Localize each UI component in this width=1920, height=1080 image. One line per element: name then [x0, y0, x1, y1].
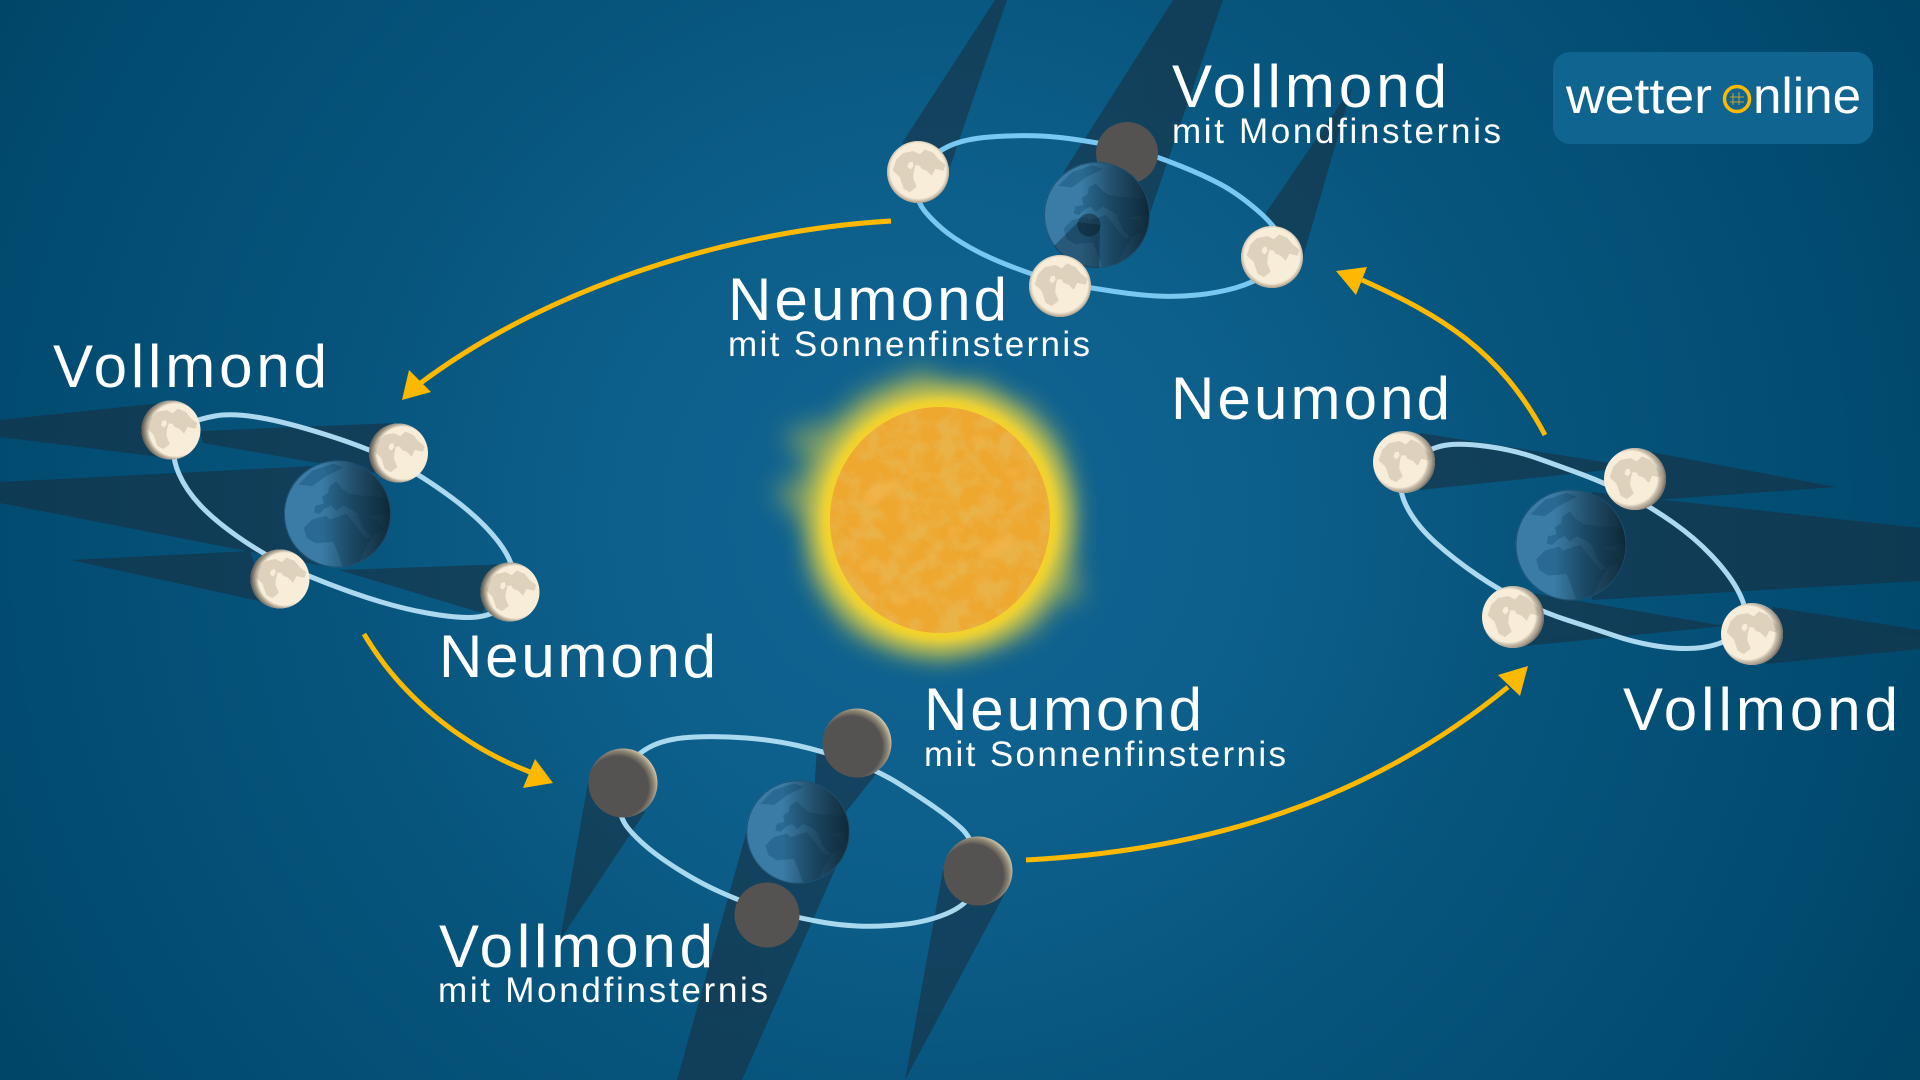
moon: top right	[1241, 226, 1303, 288]
label: right Neumond: Neumond	[1171, 365, 1450, 432]
arrow: left to bottom	[364, 634, 553, 788]
logo: wetteronline	[1553, 52, 1873, 144]
moon shadow on earth	[1054, 214, 1100, 268]
bottom orbit	[617, 737, 978, 926]
top orbit	[915, 136, 1285, 296]
label: right Vollmond: Vollmond	[1623, 676, 1898, 743]
label: top Vollmond mit Mondfinsternis: Vollmond	[1172, 53, 1447, 120]
right orbit	[1401, 444, 1746, 649]
label: top Vollmond mit Mondfinsternis	[1172, 53, 1501, 151]
moon: left top-left	[142, 400, 200, 460]
arrow: top to left	[402, 221, 891, 400]
moon: eclipsed bottom	[734, 882, 800, 948]
label: bottom Vollmond mit Mondfinsternis: mit Mondfinsternis	[438, 971, 768, 1010]
sun disc	[830, 407, 1050, 633]
left orbit	[174, 415, 513, 618]
arrow: right to top	[1336, 267, 1545, 435]
moon: top left	[887, 141, 949, 203]
moon: top bottom	[1029, 255, 1091, 317]
label: top Vollmond mit Mondfinsternis: mit Mondfinsternis	[1172, 112, 1501, 151]
bottom group shadows	[560, 747, 1005, 1080]
moon: bottom top-right	[822, 708, 892, 778]
right group shadows	[1420, 433, 1920, 664]
label: left Neumond: Neumond	[439, 623, 716, 690]
left group shadows	[0, 403, 510, 613]
moon: bottom right	[944, 836, 1012, 906]
moon: left bottom-right	[480, 562, 540, 622]
label: bottom Vollmond mit Mondfinsternis: Vollmond	[439, 913, 713, 980]
label: bottom Neumond mit Sonnenfinsternis: Neumond	[924, 676, 1202, 743]
orbit group: bottom (Neumond mit Sonnenfinsternis / Vollmond mit Mondfinsternis)	[560, 708, 1012, 1080]
label: top Neumond mit Sonnenfinsternis	[728, 266, 1090, 364]
moon: right top-left	[1373, 431, 1435, 493]
label: bottom Neumond mit Sonnenfinsternis	[924, 676, 1286, 774]
moon: right bottom-left	[1482, 586, 1544, 648]
earth: bottom	[746, 780, 850, 885]
moon: left top-right	[369, 424, 428, 482]
logo: wetteronline: nline	[1753, 68, 1861, 124]
orbit group: right (Neumond / Vollmond)	[1373, 431, 1920, 665]
moon: right top-right	[1604, 448, 1666, 510]
earth: right	[1516, 490, 1626, 602]
logo: wetteronline: wetter	[1565, 68, 1712, 124]
arrow: bottom to right	[1026, 666, 1528, 860]
moon: left bottom-left	[250, 550, 310, 608]
label: left Vollmond: Vollmond	[53, 333, 327, 400]
moon: eclipsed top	[1096, 122, 1158, 184]
label: top Neumond mit Sonnenfinsternis: Neumond	[728, 266, 1007, 333]
earth: left	[284, 460, 391, 569]
orbit group: top (Vollmond mit Mondfinsternis / Neumond mit Sonnenfinsternis)	[887, 0, 1352, 317]
sun	[773, 367, 1083, 660]
logo: yellow globe O	[1724, 86, 1750, 112]
earth: top	[1044, 162, 1150, 270]
label: bottom Neumond mit Sonnenfinsternis: mit Sonnenfinsternis	[924, 735, 1286, 774]
top group shadows	[902, 0, 1352, 257]
label: bottom Vollmond mit Mondfinsternis	[438, 913, 768, 1010]
label: top Neumond mit Sonnenfinsternis: mit Sonnenfinsternis	[728, 325, 1090, 364]
sun corona	[773, 367, 1083, 660]
moon: right bottom-right	[1721, 603, 1783, 665]
orbit group: left (Vollmond / Neumond)	[0, 400, 540, 622]
moon: bottom top-left	[588, 748, 658, 818]
